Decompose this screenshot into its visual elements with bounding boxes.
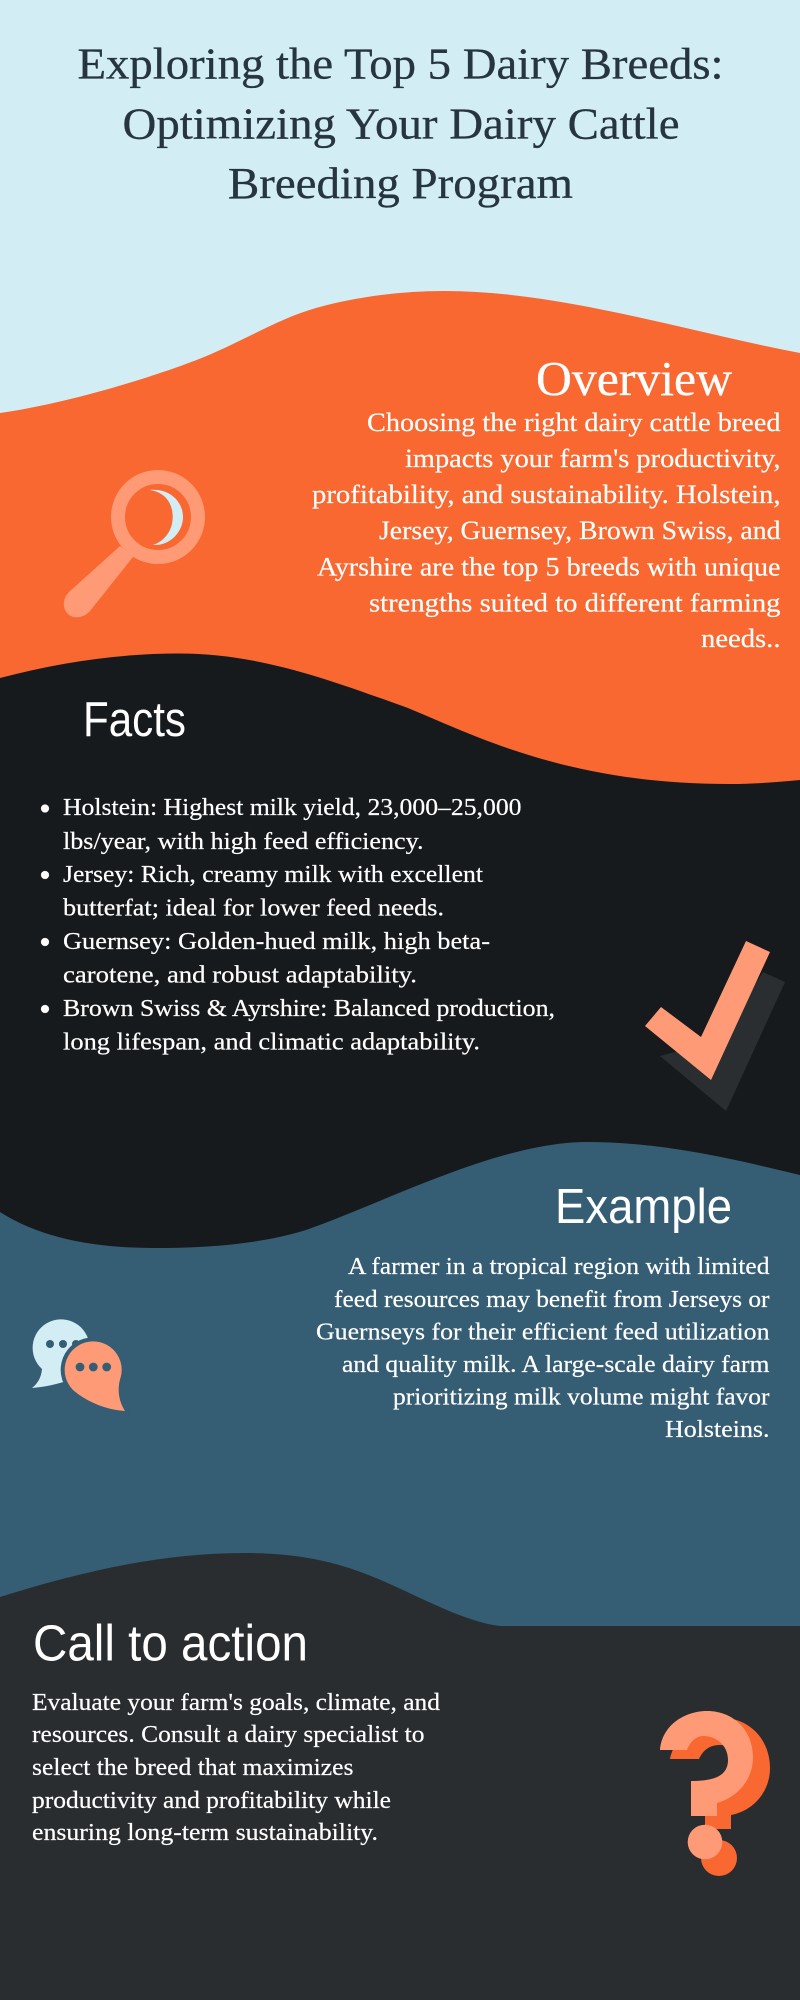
text block: example: Holsteins.: [665, 1416, 770, 1443]
text block: call to action: resources. Consult a dairy specialist to: [32, 1721, 424, 1748]
text block: call to action: productivity and profitability while: [32, 1787, 391, 1814]
text block: example: and quality milk. A large-scale dairy farm: [342, 1351, 770, 1378]
text block: example: Guernseys for their efficient feed utilization: [316, 1318, 770, 1346]
text block: overview: [312, 408, 780, 653]
text block: overview: Jersey, Guernsey, Brown Swiss, and: [379, 516, 780, 545]
bulleted list: facts: Brown Swiss & Ayrshire: Balanced production,: [63, 995, 555, 1022]
heading: example: Example: [555, 1180, 732, 1234]
bulleted list: facts: carotene, and robust adaptability.: [63, 962, 417, 988]
icon: speech bubbles: [32, 1319, 125, 1411]
heading: call to action: Call to action: [33, 1614, 308, 1672]
text block: call to action: Evaluate your farm's goals, climate, and: [32, 1689, 440, 1716]
bulleted list: facts: butterfat; ideal for lower feed needs.: [63, 894, 444, 922]
title: Exploring the Top 5 Dairy Breeds:: [78, 40, 724, 88]
text block: example: feed resources may benefit from Jerseys or: [334, 1286, 770, 1313]
title: [78, 40, 724, 208]
bulleted list: facts: long lifespan, and climatic adaptability.: [63, 1028, 480, 1056]
title: Breeding Program: [228, 159, 573, 208]
panel: example background wave: [0, 1142, 800, 2000]
text block: overview: profitability, and sustainability. Holstein,: [312, 480, 780, 509]
panel: call to action background wave: [0, 1553, 800, 2000]
text block: call to action: [32, 1689, 440, 1846]
bulleted list: facts: [41, 794, 555, 1056]
text block: call to action: ensuring long-term sustainability.: [32, 1819, 378, 1846]
title: Optimizing Your Dairy Cattle: [122, 100, 680, 148]
text block: call to action: select the breed that maximizes: [32, 1754, 354, 1781]
icon: magnifying glass: [64, 477, 198, 617]
bulleted list: facts: Jersey: Rich, creamy milk with excellent: [63, 861, 483, 888]
text block: overview: impacts your farm's productivity,: [405, 444, 780, 473]
bulleted list: facts: lbs/year, with high feed efficiency.: [63, 828, 424, 855]
bulleted list: facts: Guernsey: Golden-hued milk, high beta-: [63, 928, 490, 955]
icon: question mark: [660, 1711, 770, 1876]
heading: facts: Facts: [83, 693, 186, 747]
text block: overview: strengths suited to different farming: [369, 588, 780, 618]
heading: overview: Overview: [536, 351, 733, 406]
icon: check mark: [645, 941, 785, 1111]
text block: overview: Ayrshire are the top 5 breeds with unique: [317, 552, 780, 582]
text block: overview: Choosing the right dairy cattle breed: [367, 408, 780, 437]
bulleted list: facts: Holstein: Highest milk yield, 23,000–25,000: [63, 794, 522, 821]
text block: example: prioritizing milk volume might favor: [393, 1384, 770, 1410]
panel: facts background wave: [0, 654, 800, 2000]
text block: example: A farmer in a tropical region with limited: [348, 1253, 770, 1280]
text block: example: [316, 1253, 770, 1443]
text block: overview: needs..: [701, 624, 780, 653]
